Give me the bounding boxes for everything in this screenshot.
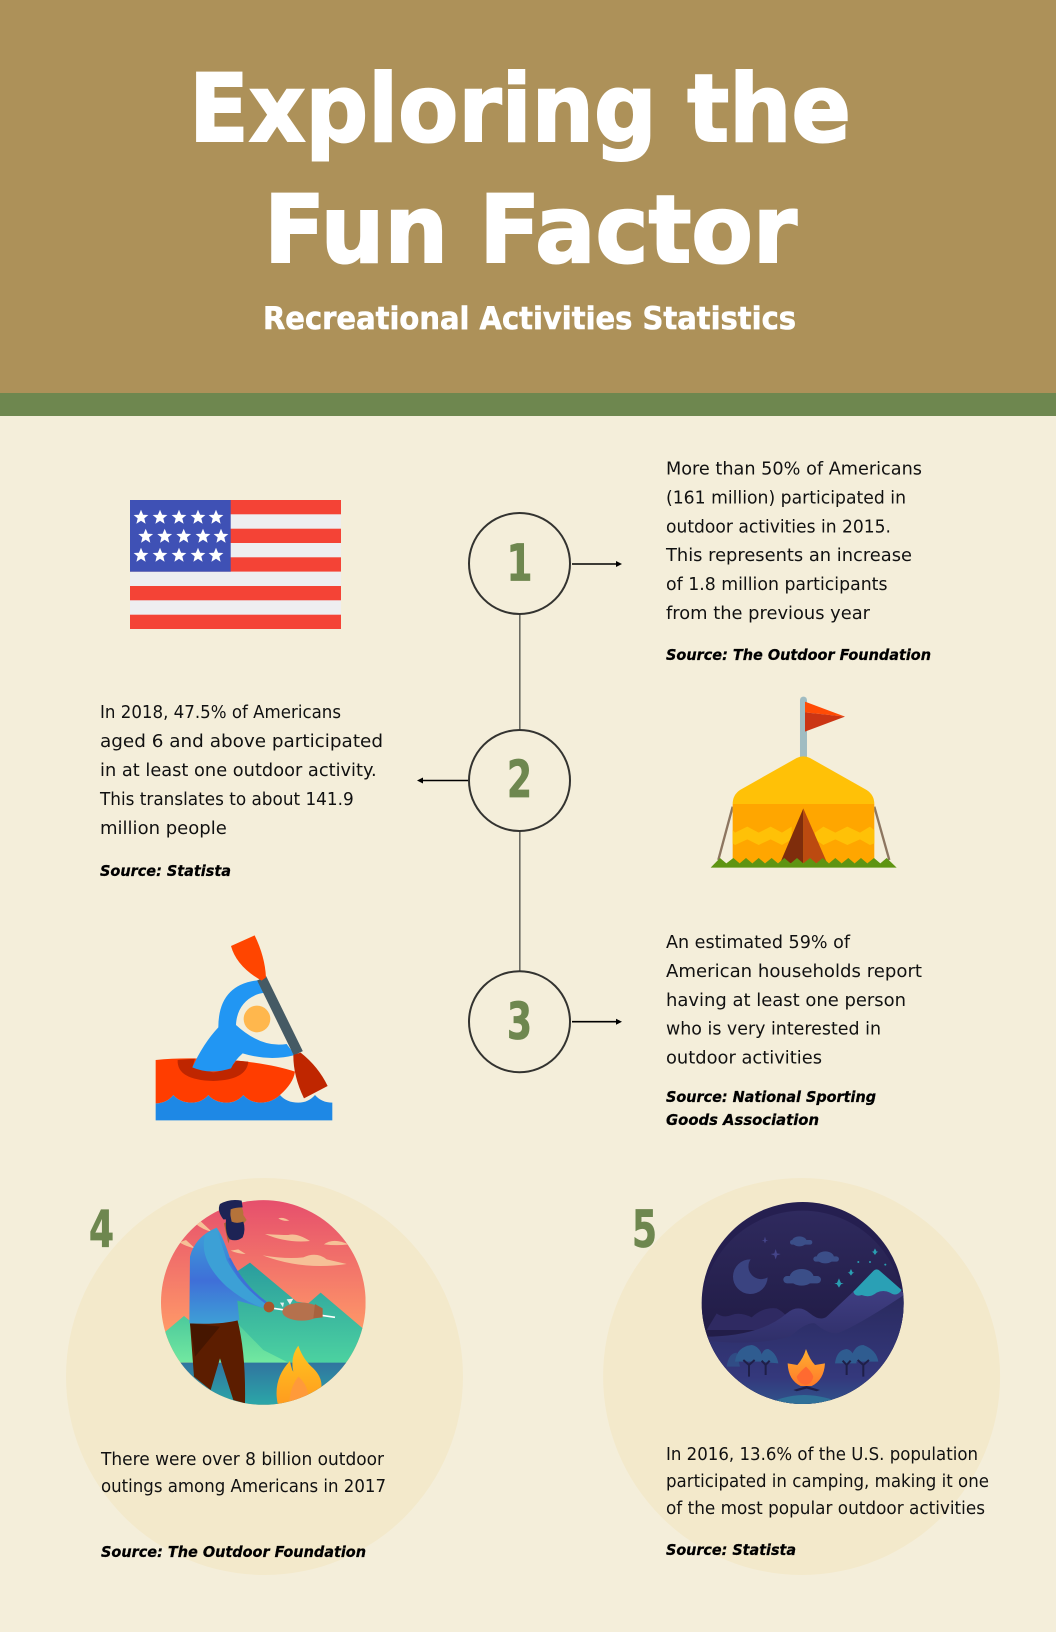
illustration: man roasting over campfire [161, 1200, 367, 1407]
step 2 text: in at least one outdoor activity. [100, 760, 377, 781]
step 1 marker [469, 513, 570, 614]
step 3 text: Goods Association [666, 1111, 819, 1129]
step 2 text [99, 702, 383, 880]
step 2 text: Source: Statista [100, 862, 231, 880]
fact 4 text [100, 1449, 386, 1561]
step 1 text: (161 million) participated in [666, 488, 906, 508]
step 2 text: aged 6 and above participated [100, 731, 383, 752]
panel 4 background circle [66, 1178, 463, 1575]
subtitle: Recreational Activities Statistics [263, 301, 796, 337]
icon: kayak [156, 935, 332, 1120]
icon: tent [711, 697, 897, 868]
step 3 marker [469, 971, 570, 1072]
title [189, 55, 851, 285]
fact 4 text: There were over 8 billion outdoor [100, 1449, 385, 1470]
timeline connectors [519, 614, 521, 972]
arrow: step 1 to text [572, 561, 622, 567]
panel: fact 4 [66, 1178, 463, 1575]
icon: american flag [130, 500, 341, 629]
step 2 marker: 2 [507, 751, 532, 810]
step 3 text: who is very interested in [666, 1018, 881, 1040]
fact 4 text: Source: The Outdoor Foundation [101, 1543, 366, 1561]
green divider band [0, 393, 1056, 416]
step 3 marker: 3 [507, 993, 532, 1052]
number 4: 4 [89, 1201, 114, 1260]
fact 5 text [666, 1444, 989, 1559]
panel 5 background circle [603, 1178, 1000, 1575]
title: Fun Factor [264, 176, 798, 285]
step 1 text: of 1.8 million participants [666, 574, 888, 595]
step 1 text [665, 458, 931, 664]
step 3 text: American households report [666, 961, 922, 982]
illustration: night campfire [700, 1202, 907, 1413]
fact 5 text: of the most popular outdoor activities [666, 1498, 985, 1519]
step 1 text: This represents an increase [665, 545, 912, 566]
fact 5 text: Source: Statista [666, 1541, 796, 1559]
fact 5 text: In 2016, 13.6% of the U.S. population [666, 1444, 978, 1465]
step 3 text [666, 932, 922, 1129]
step 1 text: Source: The Outdoor Foundation [666, 646, 931, 664]
arrow: step 3 to text [572, 1019, 622, 1025]
step 2 marker [469, 730, 570, 831]
step 3 text: An estimated 59% of [666, 932, 851, 953]
step 3 text: Source: National Sporting [666, 1088, 876, 1106]
header band [0, 0, 1056, 393]
number 5: 5 [632, 1201, 657, 1260]
fact 4 text: outings among Americans in 2017 [101, 1476, 386, 1497]
step 2 text: In 2018, 47.5% of Americans [100, 702, 341, 723]
title: Exploring the [189, 55, 851, 164]
step 1 text: More than 50% of Americans [666, 458, 922, 480]
step 2 text: million people [100, 818, 227, 839]
step 3 text: having at least one person [666, 990, 906, 1011]
fact 5 text: participated in camping, making it one [666, 1471, 989, 1492]
step 1 text: outdoor activities in 2015. [666, 516, 891, 538]
arrow: step 2 to text [417, 778, 468, 784]
panel: fact 5 [603, 1178, 1000, 1575]
step 1 marker: 1 [506, 534, 532, 594]
step 2 text: This translates to about 141.9 [99, 789, 354, 810]
step 3 text: outdoor activities [666, 1048, 822, 1068]
step 1 text: from the previous year [666, 603, 871, 624]
